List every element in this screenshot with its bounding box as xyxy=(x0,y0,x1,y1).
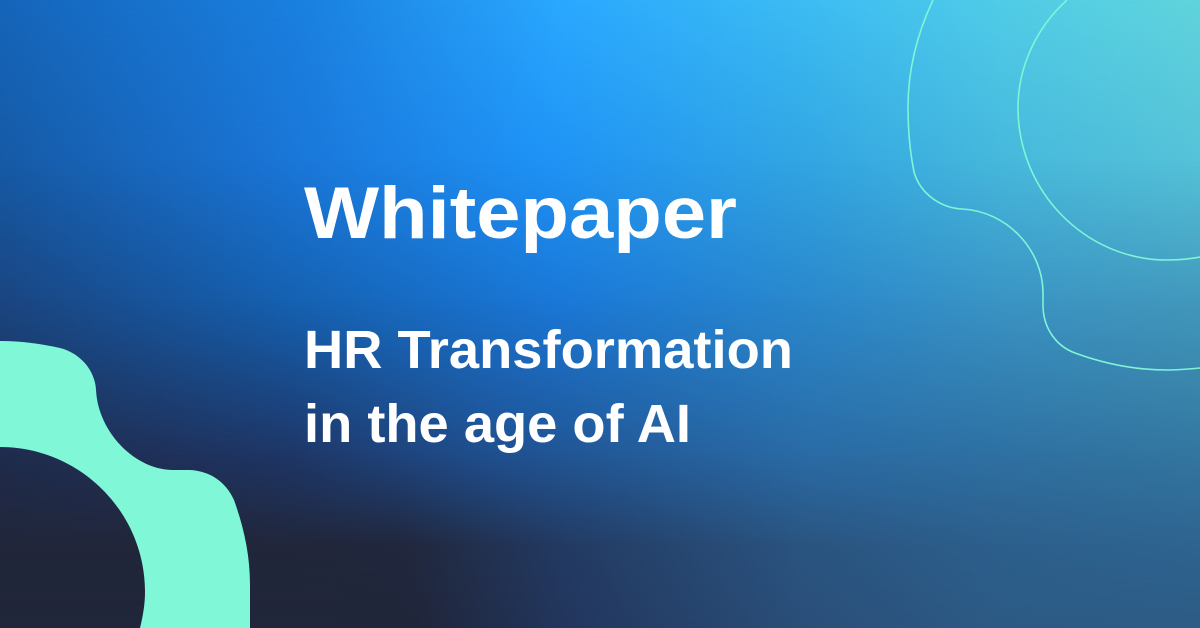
subtitle xyxy=(304,320,793,454)
outer contour line xyxy=(908,0,1200,370)
subtitle line 2: in the age of AI xyxy=(304,394,691,454)
inner circle arc xyxy=(1018,0,1200,260)
decorative mint gear shape, bottom left xyxy=(0,341,250,628)
subtitle line 1: HR Transformation xyxy=(304,320,793,380)
heading: Whitepaper: Whitepaper xyxy=(304,173,737,254)
outlined gear shape, top right xyxy=(908,0,1200,370)
